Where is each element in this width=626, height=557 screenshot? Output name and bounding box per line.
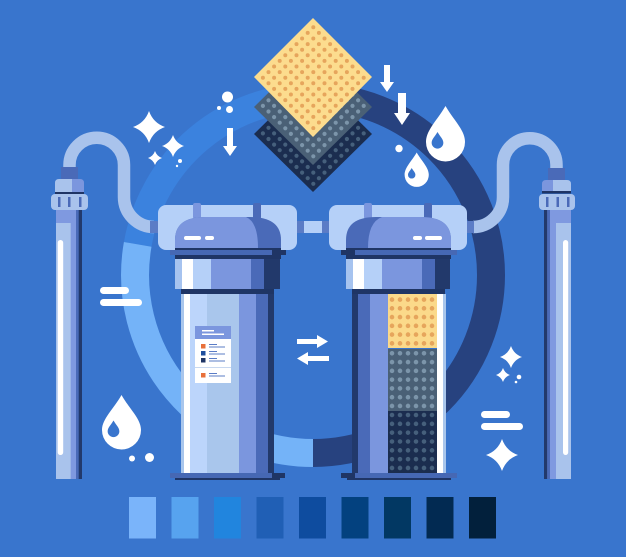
circular water flow ring — [135, 97, 491, 453]
hose — [70, 138, 154, 227]
hose end fitting — [467, 221, 474, 233]
hose end fitting — [150, 221, 158, 233]
filter stack: grey layer — [388, 349, 437, 411]
colour swatches — [129, 497, 496, 538]
navy layer — [254, 76, 372, 192]
sparkles top left — [133, 111, 184, 167]
filter media layers — [254, 18, 372, 192]
icon: small water drop — [405, 152, 429, 187]
arrow: down right lower — [394, 93, 410, 125]
filter stack: navy layer — [388, 411, 437, 473]
cylinder body — [181, 294, 274, 473]
right filter housing — [329, 203, 467, 480]
left inlet pipe — [51, 138, 158, 479]
coupling — [539, 168, 575, 210]
mounting posts — [364, 203, 432, 219]
collar band — [170, 248, 286, 259]
collar — [175, 259, 280, 294]
collar — [346, 259, 450, 294]
exchange arrows — [297, 335, 329, 365]
arrow: down right upper — [380, 65, 394, 92]
flow lines left — [100, 287, 142, 306]
base — [170, 473, 285, 480]
mounting posts — [193, 203, 261, 219]
tube body — [544, 210, 571, 479]
tube body — [56, 210, 82, 479]
flow lines right — [481, 411, 523, 430]
filter stack: yellow layer — [388, 294, 437, 348]
yellow layer — [254, 18, 372, 137]
bubble top right — [395, 145, 403, 152]
left filter housing — [158, 203, 297, 480]
dome cap — [346, 217, 451, 248]
grey layer — [254, 49, 372, 165]
arrow: down left of filter media — [223, 128, 237, 156]
bubbles top left — [217, 92, 233, 113]
mounting plate — [158, 205, 297, 250]
product label — [195, 326, 231, 383]
cylinder body — [352, 294, 446, 473]
icon: water drop bottom left — [102, 395, 141, 450]
sparkles right — [496, 346, 522, 383]
coupling — [51, 167, 88, 210]
mounting plate — [329, 205, 467, 250]
right outlet pipe — [467, 138, 575, 479]
connector between filters — [297, 221, 329, 233]
sparkle bottom right — [486, 439, 518, 471]
dome cap — [175, 217, 281, 248]
icon: large water drop — [426, 106, 465, 162]
bubbles bottom left — [129, 453, 154, 462]
base — [341, 473, 457, 480]
collar band — [341, 248, 457, 259]
hose — [473, 138, 556, 227]
